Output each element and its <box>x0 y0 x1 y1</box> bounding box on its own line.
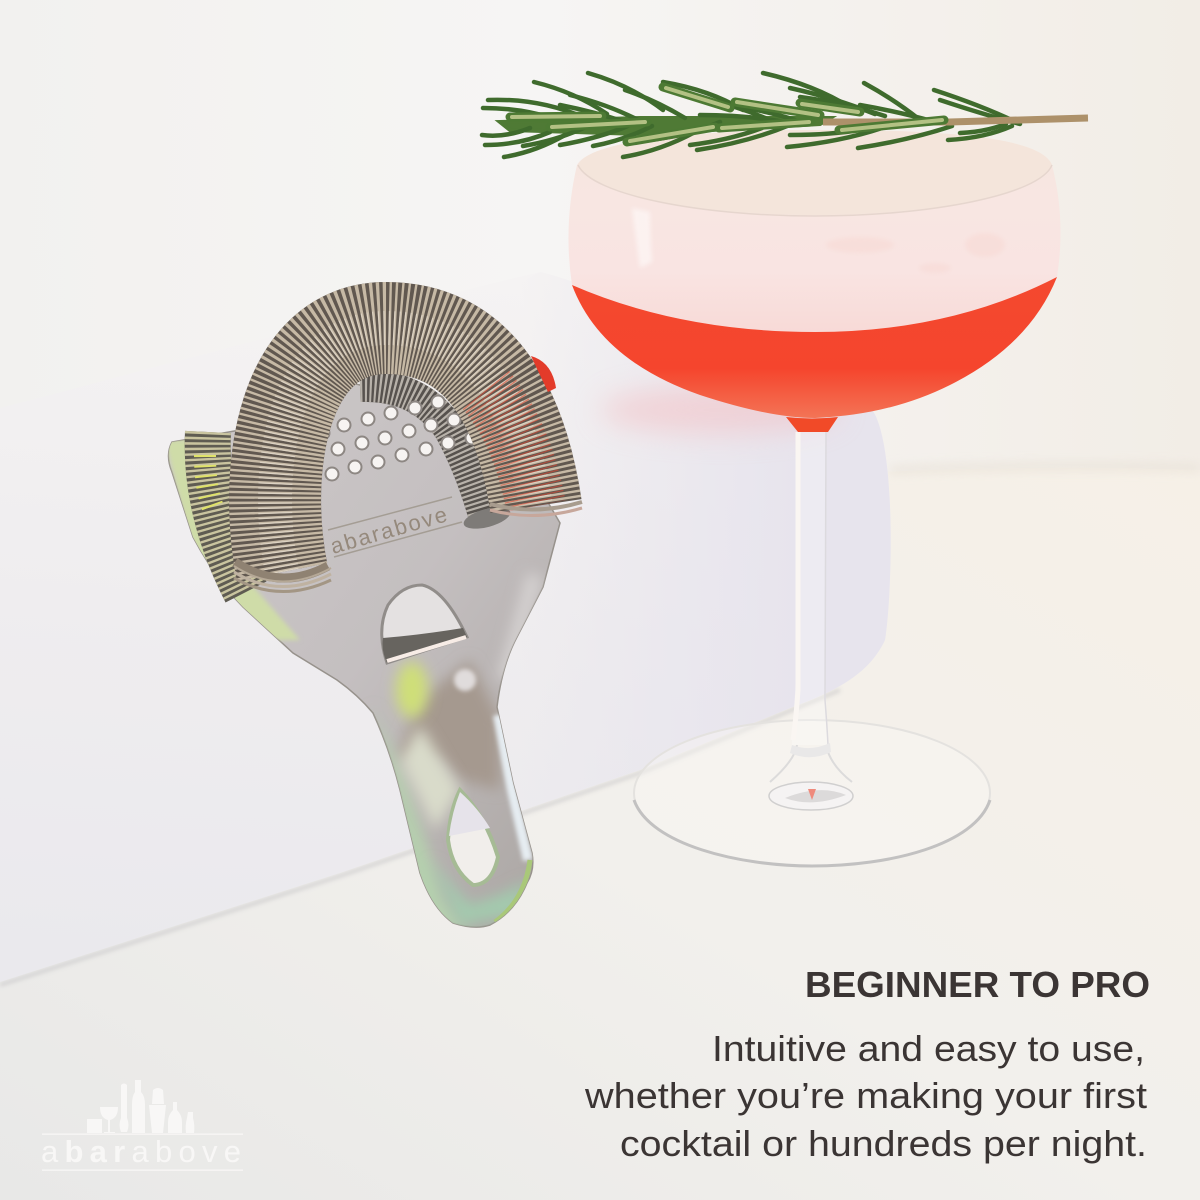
foam <box>568 130 1061 332</box>
pale fat leaves <box>510 87 944 142</box>
strainer <box>165 328 582 930</box>
logo icon: bottles on shelf <box>87 1080 194 1133</box>
sprig stem <box>823 118 1088 122</box>
engraved brand band: abarabove <box>327 501 452 559</box>
small rear coil on left <box>205 432 246 592</box>
handle hang hole <box>448 790 498 885</box>
body text <box>584 1028 1147 1164</box>
glass stem <box>790 432 831 757</box>
folded white towel <box>0 272 891 985</box>
main spring coil <box>234 328 582 592</box>
logo: abarabove <box>41 1080 243 1171</box>
inner rear coil <box>360 386 513 533</box>
liquid <box>572 277 1057 418</box>
bottle opener cutout <box>382 585 467 663</box>
strainer holes <box>316 396 478 480</box>
lower and upper dark leaves <box>482 73 1020 157</box>
dense centre of needles <box>500 118 830 134</box>
heading: BEGINNER TO PRO <box>805 964 1150 1005</box>
foam speckles and highlight <box>632 208 1005 273</box>
glass rim <box>578 165 1052 216</box>
red reflection behind coil <box>531 356 556 392</box>
foam top surface behind rim <box>578 130 1052 215</box>
body text: whether you’re making your first <box>584 1075 1147 1116</box>
strainer plate and handle <box>165 380 560 930</box>
body text: cocktail or hundreds per night. <box>620 1123 1147 1164</box>
body text: Intuitive and easy to use, <box>712 1028 1145 1069</box>
glass foot <box>634 720 990 866</box>
neck of glass <box>786 417 838 432</box>
logo wordmark: abarabove <box>41 1134 241 1169</box>
coupe glass <box>568 130 1061 866</box>
rosemary sprig <box>482 73 1088 157</box>
